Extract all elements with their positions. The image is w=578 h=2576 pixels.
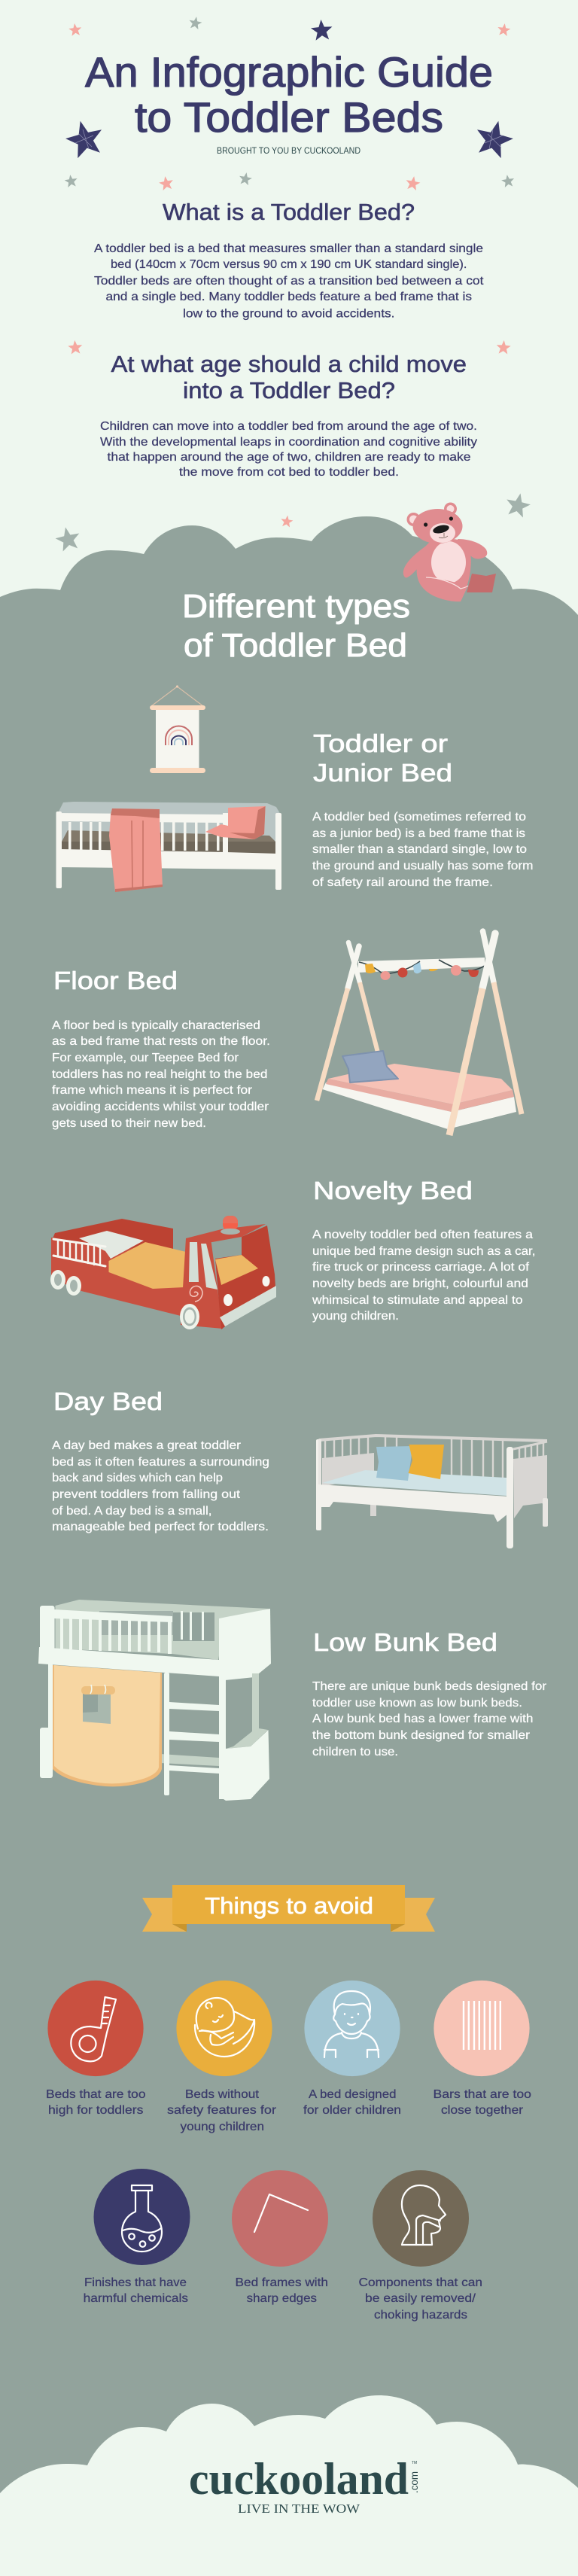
body text: as a bed frame that rests on the floor. (52, 1035, 270, 1048)
body text (312, 1229, 536, 1323)
logo: cuckooland: cuckooland (189, 2454, 409, 2504)
label (46, 2088, 146, 2117)
item: beds too high (46, 1981, 146, 2117)
illustration: teepee floor bed (317, 931, 522, 1135)
icon: sleeping baby (195, 1998, 254, 2057)
section: what is a toddler bed (94, 199, 484, 321)
body text: A day bed makes a great toddler (52, 1439, 242, 1452)
item: beds without safety features (167, 1981, 277, 2133)
label: Beds without (185, 2088, 260, 2101)
icon: boy (324, 1991, 379, 2057)
paragraph: and a single bed. Many toddler beds feature a bed frame that is (105, 291, 472, 303)
paragraph (100, 420, 477, 479)
label: for older children (303, 2104, 401, 2117)
body text: back and sides which can help (52, 1472, 223, 1484)
body text: of bed. A day bed is a small, (52, 1505, 212, 1518)
body text (52, 1439, 269, 1533)
body text: A low bunk bed has a lower frame with (312, 1713, 533, 1725)
body text: fire truck or princess carriage. A lot of (312, 1261, 530, 1274)
heading: Junior Bed (313, 759, 452, 787)
section heading: different types: of Toddler Bed (184, 627, 407, 664)
paragraph (94, 242, 484, 321)
body text: toddlers has no real height to the bed (52, 1068, 268, 1081)
heading: Novelty Bed (313, 1177, 473, 1204)
heading: Day Bed (53, 1387, 163, 1415)
heading (313, 729, 452, 787)
body text (312, 811, 533, 889)
illustration: fire truck bed (50, 1216, 276, 1329)
body text (52, 1019, 270, 1130)
body text: novelty beds are bright, colourful and (312, 1277, 528, 1290)
title: to Toddler Beds (135, 93, 443, 141)
body text: prevent toddlers from falling out (52, 1488, 241, 1501)
section: floor bed text (52, 967, 270, 1130)
label (167, 2088, 277, 2133)
icon: bars (464, 2001, 500, 2050)
body text: bed as it often features a surrounding (52, 1456, 269, 1469)
body text: manageable bed perfect for toddlers. (52, 1521, 269, 1533)
item: bed designed for older children (303, 1981, 401, 2117)
icon: head and throat (402, 2185, 446, 2245)
body text: A toddler bed (sometimes referred to (312, 811, 526, 824)
paragraph: low to the ground to avoid accidents. (183, 307, 394, 321)
heading: At what age should a child move (111, 351, 467, 377)
illustration: day bed (316, 1436, 548, 1548)
body text: There are unique bunk beds designed for (312, 1680, 547, 1693)
label: A bed designed (309, 2088, 396, 2101)
label: Bed frames with (235, 2276, 328, 2289)
label: young children (181, 2121, 264, 2133)
heading: What is a Toddler Bed? (163, 199, 415, 225)
banner: things to avoid: Things to avoid (205, 1892, 373, 1919)
paragraph: Children can move into a toddler bed from around the age of two. (100, 420, 477, 433)
label: Bars that are too (434, 2088, 531, 2101)
heading: Low Bunk Bed (313, 1628, 497, 1656)
body text: A novelty toddler bed often features a (312, 1229, 533, 1241)
item: sharp edges (232, 2170, 328, 2305)
icon: tape measure (71, 1997, 116, 2061)
footer cloud (0, 2395, 578, 2576)
label (84, 2276, 188, 2305)
icon: flask (122, 2185, 162, 2252)
label (434, 2088, 531, 2117)
heading: Floor Bed (53, 967, 178, 994)
paragraph: the move from cot bed to toddler bed. (179, 466, 399, 479)
section: day bed text (52, 1387, 269, 1533)
label: high for toddlers (48, 2104, 143, 2117)
illustration: toddler bed with blanket (56, 802, 281, 892)
label: Finishes that have (84, 2276, 187, 2289)
body text: whimsical to stimulate and appeal to (312, 1294, 523, 1307)
body text (312, 1680, 547, 1758)
heading: into a Toddler Bed? (183, 377, 395, 403)
item: harmful finishes (84, 2169, 190, 2305)
paragraph: A toddler bed is a bed that measures smaller than a standard single (94, 242, 483, 255)
body text: avoiding accidents whilst your toddler (52, 1101, 269, 1113)
logo: cuckooland: TM (412, 2461, 417, 2465)
label: safety features for (167, 2104, 277, 2117)
label: close together (441, 2104, 524, 2117)
paragraph: Toddler beds are often thought of as a transition bed between a cot (94, 275, 484, 288)
section: at what age (100, 351, 477, 479)
section: novelty bed text (312, 1177, 536, 1323)
illustration: low bunk bed (38, 1600, 271, 1801)
body text: the ground and usually has some form (312, 860, 533, 872)
body text: children to use. (312, 1746, 398, 1758)
body text: as a junior bed) is a bed frame that is (312, 827, 525, 840)
body text: unique bed frame design such as a car, (312, 1245, 536, 1258)
section heading: different types: Different types (182, 588, 410, 625)
heading: Toddler or (313, 729, 448, 757)
heading (111, 351, 467, 403)
body text: smaller than a standard single, low to (312, 843, 527, 856)
body text: the bottom bunk designed for smaller (312, 1729, 531, 1742)
title (85, 48, 493, 141)
section: toddler or junior bed text (312, 729, 533, 889)
body text: young children. (312, 1310, 399, 1323)
label (358, 2276, 482, 2322)
label: Beds that are too (46, 2088, 146, 2101)
body text: frame which means it is perfect for (52, 1084, 253, 1097)
logo: cuckooland: LIVE IN THE WOW (238, 2501, 360, 2516)
label: be easily removed/ (365, 2292, 476, 2305)
body text: For example, our Teepee Bed for (52, 1052, 239, 1064)
paragraph: that happen around the age of two, children are ready to make (107, 451, 471, 464)
label: Components that can (358, 2276, 482, 2289)
icon: rainbow wall hanging (150, 685, 205, 773)
label: harmful chemicals (84, 2292, 188, 2305)
icon: sharp corner (254, 2194, 308, 2232)
title: An Infographic Guide (85, 48, 493, 96)
body text: toddler use known as low bunk beds. (312, 1697, 522, 1710)
banner: things to avoid (142, 1885, 435, 1932)
byline: BROUGHT TO YOU BY CUCKOOLAND (217, 147, 360, 156)
paragraph: With the developmental leaps in coordination and cognitive ability (100, 436, 477, 449)
paragraph: bed (140cm x 70cm versus 90 cm x 190 cm UK standard single). (111, 258, 467, 271)
label (303, 2088, 401, 2117)
label: choking hazards (374, 2309, 467, 2322)
body text: gets used to their new bed. (52, 1117, 206, 1130)
label (235, 2276, 328, 2305)
sage cloud panel (0, 516, 578, 2576)
logo: cuckooland: .com (408, 2471, 420, 2493)
decorative stars: header (53, 16, 532, 553)
label: sharp edges (247, 2292, 317, 2305)
section heading: different types (182, 588, 410, 664)
body text: A floor bed is typically characterised (52, 1019, 260, 1032)
body text: of safety rail around the frame. (312, 876, 493, 889)
section: low bunk bed text (312, 1628, 547, 1758)
item: choking hazards (358, 2170, 482, 2322)
icon: teddy bear (403, 503, 496, 601)
item: bars too close (434, 1981, 531, 2117)
